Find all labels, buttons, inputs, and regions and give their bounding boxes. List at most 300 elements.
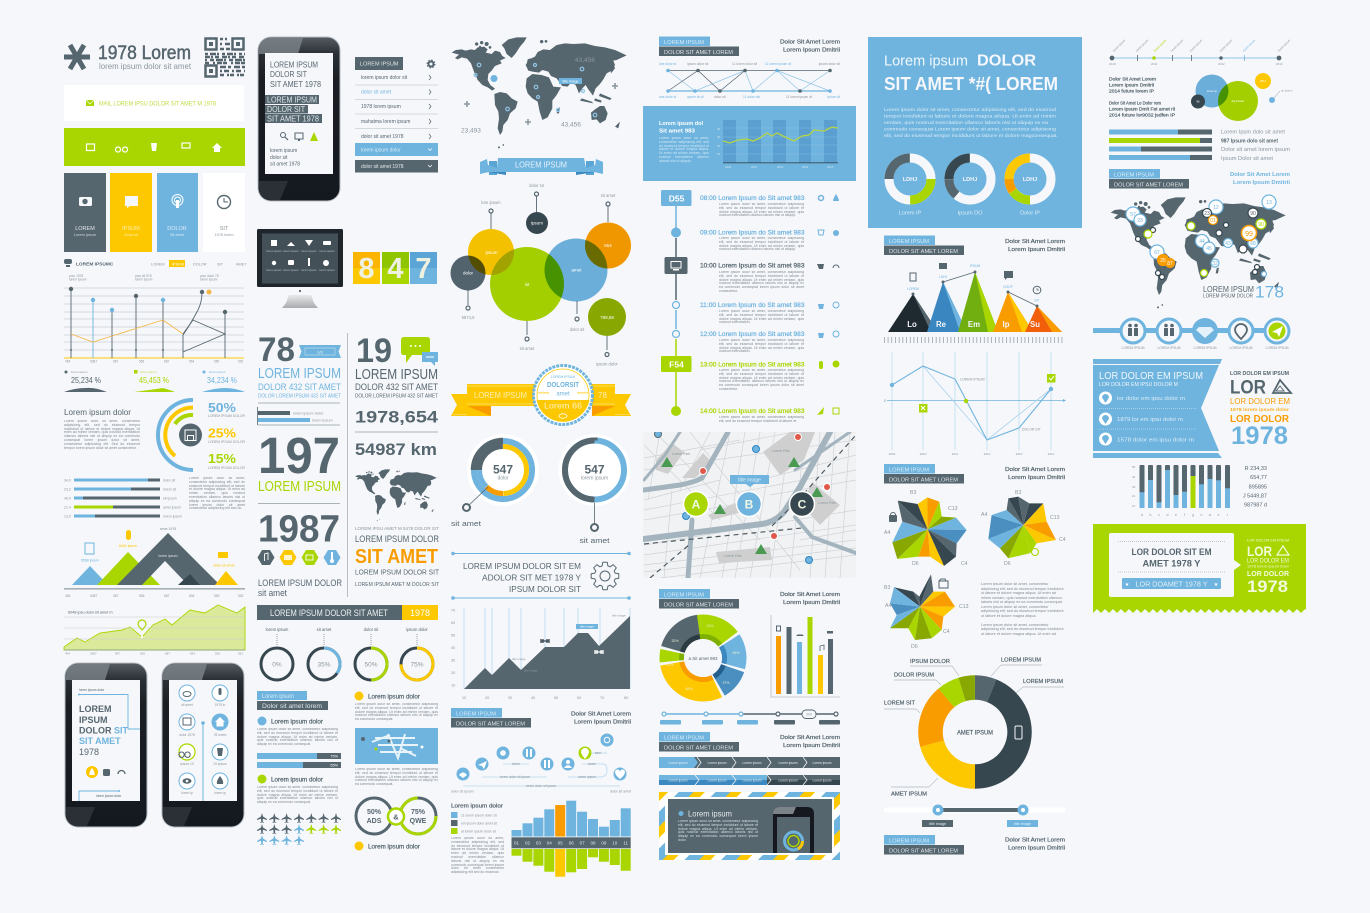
segmented donut: 45%: [685, 687, 693, 691]
big stats left: DOLOR LOREM IPSUM 432 SIT AMET: [258, 394, 341, 400]
green promo panel: LOR DOLOR: [1247, 571, 1289, 578]
segmented donut: 12%: [666, 663, 674, 667]
timeline line chart: 687: [164, 360, 170, 364]
street map: C: [798, 498, 807, 512]
mountain chart: 552: [238, 594, 244, 598]
mountain area chart: 20: [451, 671, 455, 675]
small venn: dig Flower: [1232, 99, 1245, 103]
line chart years: 2012: [984, 452, 991, 456]
star chart 2: [981, 490, 1066, 567]
section header: LOREM IPSUM: [664, 592, 704, 598]
monitor: lorem ipsum: [283, 249, 299, 253]
number tiles 847: 4: [387, 253, 404, 285]
big stats right: 1978,654: [355, 408, 439, 426]
mountain chart: 987: [113, 594, 119, 598]
horizontal bars: 34,0: [64, 478, 71, 482]
icon band: LOREM IPSUM: [1229, 346, 1253, 350]
striped air-mail banner: [659, 792, 840, 860]
panel donuts: LDHJ: [963, 177, 977, 183]
segmented donut: [659, 614, 747, 702]
mountain chart: 6568 ipsum: [81, 558, 99, 562]
mountain chart: amet 1978: [160, 527, 176, 531]
menu list: dolor sit amet 1978: [361, 134, 404, 140]
line chart years: 2014: [1048, 452, 1055, 456]
diverging column chart: [512, 801, 631, 877]
section header: DOLOR SIT AMET LOREM: [889, 848, 958, 854]
big stats right: 54987 km: [355, 440, 437, 459]
donut 547 lorem: [558, 434, 630, 545]
star chart 3: D6: [911, 644, 918, 650]
panel donuts: Ipsum DO: [958, 210, 983, 216]
mountain area chart: 50: [554, 696, 558, 700]
star chart 2: C13: [1050, 515, 1060, 521]
icon flow: lorem dolor sit ipsum: [526, 784, 556, 788]
caption: sit amet: LOREM IPSUM AMET M DOLOR SIT: [355, 582, 440, 588]
section header: DOLOR SIT AMET LOREM: [889, 477, 958, 483]
monitor: lorem ipsum: [283, 268, 299, 272]
section header: Lorem Ipsum Dmitrii: [1008, 846, 1065, 852]
mountain chart: 556: [139, 594, 145, 598]
star chart 1: C4: [961, 561, 968, 567]
blue arrow ribbon: lor dolor em ipsu dolor m: [1117, 396, 1185, 402]
world map with pins: 99: [1245, 231, 1253, 238]
mountain area chart: 70: [600, 696, 604, 700]
star chart 3: [884, 574, 969, 650]
segmented donut: 32%: [671, 639, 679, 643]
radial percent chart: LOREM IPSUM DOLOR: [208, 466, 245, 470]
diverging column chart: 09: [601, 840, 607, 846]
tile: dolor: DOLOR: [167, 226, 187, 232]
section header: Lorem Ipsum Dmitrii: [1008, 475, 1065, 481]
mountain chart: lorem ipsum: [158, 554, 178, 558]
lorem ipsum article left: Dolor sit amet lorem: [262, 704, 322, 710]
percent rings: [261, 627, 433, 680]
tab chart header: LOREM IPSUMC: [76, 262, 114, 268]
star chart 2: C4: [1059, 537, 1066, 543]
section header: Dolor Sit Amet Lorem: [571, 712, 631, 718]
icon flow: lorem: [512, 762, 520, 766]
big stats left: [257, 331, 341, 550]
mountain area chart: 60: [451, 621, 455, 625]
stacked bars: c: [1158, 513, 1160, 517]
phone 1: IPSUM: [79, 715, 108, 725]
line chart years: DOLOR SIT: [1022, 428, 1042, 432]
section header: DOLOR SIT AMET LOREM: [664, 602, 733, 608]
tile: sit: [203, 173, 245, 252]
progress bars: Dolor sit amet lorem ipsum: [1221, 147, 1290, 153]
menu list: 1978 lorem ipsum: [361, 104, 401, 110]
number tiles 847: 7: [415, 253, 432, 285]
chevron process bars: Lorem ipsum: [742, 761, 762, 765]
text: lorem ipsum dolor: [64, 408, 140, 458]
small venn: 96: [1196, 100, 1200, 104]
mountain area chart: 70: [451, 608, 455, 612]
horizontal bars: [64, 477, 245, 519]
horizontal bars: dolor sit: [163, 478, 175, 482]
triangle peaks chart: SIT: [1034, 298, 1040, 302]
donut 547 dolor: sit amet: [451, 519, 482, 528]
venn bubble diagram: sit amet: [520, 346, 535, 351]
milestone timeline: 2013: [1276, 62, 1283, 66]
blue chart panel: 2013: [802, 165, 809, 169]
phone 1: LOREM: [79, 704, 112, 714]
mountain chart: [64, 527, 245, 598]
timeline line chart: your 1978: [69, 274, 83, 278]
percent rings: lorem ipsum: [266, 627, 289, 632]
section header: LOREM IPSUM: [889, 467, 929, 473]
green promo panel: LOR DOAMET 1978 Y: [1136, 580, 1208, 588]
section header: LOREM IPSUM: [664, 40, 704, 46]
large phone: DOLOR SIT: [270, 69, 307, 79]
triangle peaks chart: Ip: [1003, 320, 1010, 329]
mountain area chart: 80: [624, 696, 628, 700]
big stats left: lorem ipsum: [312, 418, 333, 422]
large phone: [258, 37, 340, 201]
phone 2: dolor 1978: [179, 733, 195, 737]
stacked bars: a: [1141, 513, 1143, 517]
day schedule timeline: 11:00 Lorem Ipsum do Sit amet 983: [700, 302, 805, 309]
star chart 2: B3: [1015, 490, 1021, 496]
horizontal bars: 21,4: [64, 506, 71, 510]
world map with pins: 01: [1210, 218, 1216, 224]
stacked bars: 654,77: [1250, 475, 1267, 481]
big stats left: lorem ipsum dolor: [293, 412, 324, 416]
phone 2: lorem ip: [214, 791, 226, 795]
section header: [451, 708, 631, 728]
text notes: 2014 future lorem IP: [1109, 88, 1154, 94]
stacked bars: 987987 d: [1244, 502, 1267, 508]
tile: sit: 1978 lorem: [214, 233, 234, 237]
map markers: 43,456: [561, 122, 581, 128]
mountain chart: 687: [164, 594, 170, 598]
world map with pins: 25: [1160, 258, 1166, 264]
lorem ipsum article left: Lorem ipsum dolor: [271, 778, 323, 784]
step slider: [660, 710, 840, 724]
caption: sit amet: SIT AMET: [355, 546, 438, 568]
title image slider: title image: [1014, 822, 1031, 826]
stacked bars: u: [1201, 513, 1203, 517]
street map: A: [692, 498, 701, 512]
stacked bars: 895895: [1249, 484, 1267, 490]
section header: Lorem Ipsum Dmitrii: [783, 743, 840, 749]
icon flow: [451, 734, 631, 794]
milestone timeline: lorem ipsum: [1112, 38, 1127, 53]
star chart text: Lorem ipsum dolor sit amet, consectetur adipisicing elit, sed do eiusmod tempor incididunt ut labore et dolore magna aliqua. Ut enim ad: [981, 622, 1064, 636]
large phone: SIT AMET 1978: [270, 79, 321, 89]
triangle peaks chart: LDHJ: [939, 275, 947, 279]
chevron process bars: Lorem ipsum: [778, 761, 798, 765]
mountain chart: dolor sit amet: [213, 564, 235, 568]
stats caption: LOREM IPSUM DOLOR: [258, 578, 342, 588]
timeline line chart: lorem ipsum: [200, 278, 218, 282]
menu list: LOREM IPSUM: [360, 62, 399, 68]
day schedule timeline: [661, 190, 840, 424]
text notes: Lorem Ipsum Dmitrii: [1109, 82, 1154, 88]
caption: sit amet: LOREM IPSUM DOLOR: [355, 534, 439, 544]
venn bubble diagram: 789,58: [600, 315, 614, 320]
stacked bars: r: [1227, 513, 1229, 517]
blue feature panel: veniam, quis nostrud exercitation ullamco laboris nisi ut aliquip ex ea: [884, 120, 1048, 125]
big stats right: 19: [356, 332, 392, 370]
phone 1: SIT AMET: [79, 736, 121, 746]
day schedule timeline: D55: [669, 194, 685, 204]
horizontal bars: 13,0: [64, 514, 71, 518]
day schedule timeline: 13:00 Lorem Ipsum do Sit amet 983: [700, 362, 805, 368]
monitor: lorem ipsum: [319, 268, 335, 272]
chevron process bars: [659, 757, 840, 785]
blue chart panel: 2010: [725, 165, 732, 169]
timeline line chart: lorem ipsum: [135, 278, 153, 282]
yellow badge ribbon: DOLORSIT: [547, 380, 579, 389]
large phone: SIT AMET 1978: [267, 114, 319, 124]
triangle peaks chart: [884, 263, 1065, 340]
mountain area chart: title image: [512, 657, 526, 661]
street map: title image: [738, 478, 761, 484]
segmented donut: 45%: [732, 651, 740, 655]
tile: dolor: Sit amet: [170, 233, 185, 237]
lor dolor typography: LOR DOLOR: [1230, 414, 1290, 425]
mountain area chart: 20: [485, 696, 489, 700]
horizontal bars: lorem sit: [163, 488, 176, 492]
line chart years: 0: [884, 398, 887, 403]
network line chart: ipsum dolor sit: [687, 62, 708, 66]
big stats left: 1/3: [317, 350, 323, 354]
big stats left: DOLOR 432 SIT AMET: [258, 382, 341, 393]
venn bubble diagram: dolor sit: [529, 183, 545, 188]
line chart years: 2013: [1016, 452, 1023, 456]
radial percent chart: LOREM IPSUM DOLOR: [208, 440, 245, 444]
large phone: lorem ipsum: [270, 148, 297, 154]
world map with pins: 32: [1212, 261, 1218, 267]
text notes: Dolor Sit Amet Lorem: [1109, 76, 1156, 82]
blue arrow ribbon: LOR DOLOR EM IPSU DOLOR M: [1099, 382, 1178, 388]
world map with pins: 87: [1167, 261, 1173, 267]
large phone: sit amet 1978: [270, 162, 300, 168]
percent rings: dolor sit: [364, 627, 379, 632]
stacked bars: R 234,33: [1245, 466, 1267, 472]
section header: Dolor Sit Amet Lorem: [1230, 172, 1290, 178]
icon band: LOREM IPSUM: [1121, 346, 1145, 350]
panel donuts: LDHJ: [903, 177, 917, 183]
percent rings: sit amet: [317, 627, 332, 632]
donut 547 lorem: sit amet: [580, 536, 611, 545]
stat 25,234: 25,234 %: [71, 376, 101, 385]
world map with pins: 90: [1258, 222, 1264, 228]
menu list: lorem ipsum dolor sit: [361, 75, 408, 81]
tile: ipsum: [110, 173, 152, 252]
percent rings: ipsum dolor: [406, 627, 428, 632]
star chart 3: B3: [884, 585, 890, 591]
day schedule timeline: 08:00 Lorem Ipsum do Sit amet 983: [700, 195, 805, 202]
logo block: lorem ipsum dolor sit amet: [99, 61, 192, 71]
street map: Lorem Park: [772, 449, 790, 453]
blue chart panel: 40: [717, 127, 721, 131]
panel donuts: [889, 149, 1059, 216]
mountain area chart: 40: [451, 646, 455, 650]
monitor: lorem ipsum: [301, 249, 317, 253]
tab chart header: LOREM: [151, 262, 165, 266]
line chart years: [884, 352, 1066, 456]
monitor: lorem ipsum: [266, 268, 282, 272]
lor dolor typography: LOR: [1230, 378, 1266, 398]
blue feature panel: tempor incididunt ut labore et dolore magna aliqua. Ut enim ad minim: [884, 114, 1056, 118]
timeline line chart: lorem ipsum: [69, 278, 87, 282]
radial percent chart: 15%: [208, 451, 236, 466]
section header: [659, 589, 840, 608]
blue feature panel: commodo consequat Lorem ipsum dolor sit amet, consectetur adipisicing: [884, 126, 1056, 132]
phone 2: 78 lorem: [214, 733, 227, 737]
amet ipsum donut: LOREM IPSUM: [1001, 658, 1041, 664]
section header: [884, 464, 1065, 484]
icon flow: lorem dolor sit ipsum: [500, 775, 530, 779]
monitor: lorem ipsum: [301, 268, 317, 272]
stacked bars: b: [1150, 513, 1152, 517]
mountain area chart: 30: [508, 696, 512, 700]
linked percent rings: &: [393, 812, 399, 822]
panel donuts: LDHJ: [1023, 177, 1037, 183]
day schedule timeline: F54: [669, 360, 684, 370]
phone 1: DOLOR SIT: [79, 726, 129, 736]
lor dolor typography: LOR DOLOR EM: [1230, 397, 1290, 406]
green area chart: 687: [165, 652, 170, 656]
horizontal bars: amet ipsum: [163, 506, 181, 510]
small venn: 2014: [1260, 79, 1267, 83]
yellow badge ribbon: 78: [598, 391, 607, 400]
network line chart: ipsum dolor sit: [819, 62, 840, 66]
monitor: lorem ipsum: [319, 249, 335, 253]
amet ipsum donut: LOREM SIT: [884, 700, 915, 706]
mountain area chart: title image: [612, 614, 626, 618]
caption: sit amet: LOREM IPSUM DOLOR SIT: [355, 570, 440, 576]
amet ipsum donut: AMET IPSUM: [891, 792, 927, 798]
linked percent rings: 75%: [411, 809, 426, 816]
world map with pins: 67: [1154, 250, 1160, 256]
menu list: mahatma lorem ipsum: [361, 119, 410, 125]
street map: Lorem Park: [818, 501, 836, 505]
lorem ipsum article left: 55%: [330, 764, 339, 768]
stat 45,453: 45,453 %: [139, 376, 169, 385]
timeline line chart: 987: [113, 360, 119, 364]
legend: lorem ipsum dolor: Lorem ipsum dolor sit amet, consectetur adipisicing elit, sed do eiusmod tempor incididunt ut labore et dolore magna aliqua. Ut enim ad minim veniam, quis nostrud exercitation ullamco laboris nisi ut aliquip ex ea commodo consequat lorem ipsum dolor sit amet consectetur adipisicing elit sed do eiusmod.: [451, 837, 504, 874]
number tiles 847: [353, 252, 437, 285]
venn bubble diagram: [450, 183, 631, 366]
radial percent chart: 25%: [208, 426, 236, 440]
legend: lorem ipsum dolor: 11 lorem ipsum dolor sit: [461, 814, 497, 818]
green promo panel: ★: [1125, 582, 1130, 588]
network line chart: [659, 62, 840, 99]
small venn: do ipsum: [1281, 88, 1293, 92]
milestone timeline: lorem ipsum: [1153, 38, 1168, 53]
mountain area chart: 50: [451, 634, 455, 638]
mountain area chart: 10: [462, 696, 466, 700]
blue ribbon: [480, 158, 603, 175]
chevron process bars: Lorem ipsum: [668, 778, 688, 782]
green promo panel: LOR DOLOR EM: [1247, 558, 1289, 564]
blue arrow ribbon: [1093, 359, 1222, 458]
big stats left: 197: [258, 427, 340, 484]
stacked bars: g: [1192, 513, 1194, 517]
percent rings: 50%: [364, 662, 378, 668]
network line chart: ipsum dt: [828, 95, 840, 99]
lor dolor typography: LOR DOLOR EM IPSUM: [1230, 371, 1289, 377]
day schedule timeline: 12:00 Lorem Ipsum do Sit amet 983: [700, 331, 805, 338]
mountain chart: 6464 ipsum: [119, 544, 137, 548]
lorem ipsum article left: 75%: [330, 754, 339, 758]
lor dolor typography: 1978: [1231, 422, 1288, 450]
legend: lorem ipsum dolor: [451, 804, 504, 876]
venn bubble diagram: dolor: [463, 270, 474, 276]
venn bubble diagram: sit amet: [601, 193, 616, 198]
blue chart panel: 2014: [827, 165, 834, 169]
tab chart header: SIT: [217, 262, 224, 266]
milestone timeline: 2012: [1218, 62, 1225, 66]
blue chart panel: 2012: [777, 165, 784, 169]
big stats right: DOLOR LOREM IPSUM 432 SIT AMET: [355, 394, 438, 400]
yellow badge ribbon: Lorem 66: [544, 400, 582, 410]
large phone: LOREM IPSUM: [270, 60, 318, 70]
milestone timeline: 2010: [1109, 62, 1116, 66]
green promo panel: [1093, 524, 1306, 613]
green area chart: 550: [215, 652, 220, 656]
icon band: LOREM IPSUM: [1265, 346, 1289, 350]
radial percent chart: 50%: [208, 400, 236, 415]
chevron process bars: Lorem ipsum: [778, 778, 798, 782]
section header: [659, 36, 840, 56]
world map with pins: LOREM IPSUM: [1203, 285, 1254, 294]
title bar 1978: [257, 605, 438, 620]
section header: LOREM IPSUM: [889, 239, 929, 245]
legend: lorem ipsum dolor: Lorem ipsum dolor: [451, 804, 503, 810]
tab chart header: [64, 259, 247, 268]
mountain chart: 454: [65, 594, 71, 598]
street map: Lorem Park: [724, 554, 742, 558]
star chart 1: [884, 490, 968, 567]
stacked bars: e: [1218, 513, 1220, 517]
diverging column chart: 01: [514, 840, 519, 846]
world map with pins: LOREM IPSUM DOLOR: [1203, 294, 1253, 300]
panel donuts: Lorem IP: [899, 210, 921, 216]
green area chart: 654: [190, 652, 195, 656]
chevron process bars: Lorem ipsum: [812, 761, 832, 765]
stacked bars: w: [1209, 513, 1212, 517]
mountain area chart: title image: [524, 668, 538, 672]
green area chart: 987: [115, 652, 120, 656]
world map with pins: 90: [1250, 211, 1256, 217]
timeline line chart: 552: [238, 360, 244, 364]
green area chart: 5387: [90, 652, 97, 656]
stacked bars: e: [1175, 513, 1177, 517]
number tiles 847: 8: [358, 253, 375, 285]
stacked bars: 55: [1132, 465, 1136, 469]
mountain chart: 5387: [90, 594, 98, 598]
section header: Lorem Ipsum Dmitrii: [574, 720, 631, 726]
section header: DOLOR SIT AMET LOREM: [456, 721, 525, 727]
donut 547 dolor: 547: [493, 462, 513, 476]
horizontal bars: 46,0: [64, 496, 71, 500]
logo block: [64, 42, 192, 71]
stat 25,234: [64, 370, 107, 392]
diverging column chart: 04: [547, 840, 552, 846]
timeline line chart: your sit 978: [135, 274, 152, 278]
text: lorem ipsum dolor: Lorem ipsum dolor: [64, 408, 131, 417]
icon flow: lorem: [588, 762, 596, 766]
section header: Dolor Sit Amet Lorem: [780, 40, 840, 46]
milestone timeline: [1109, 38, 1292, 66]
network line chart: 11 lorem dolor sit: [732, 62, 757, 66]
milestone timeline: lorem ipsum: [1189, 38, 1204, 53]
line chart years: 2011: [952, 452, 959, 456]
tile: ipsum: IPSUM: [122, 226, 140, 232]
